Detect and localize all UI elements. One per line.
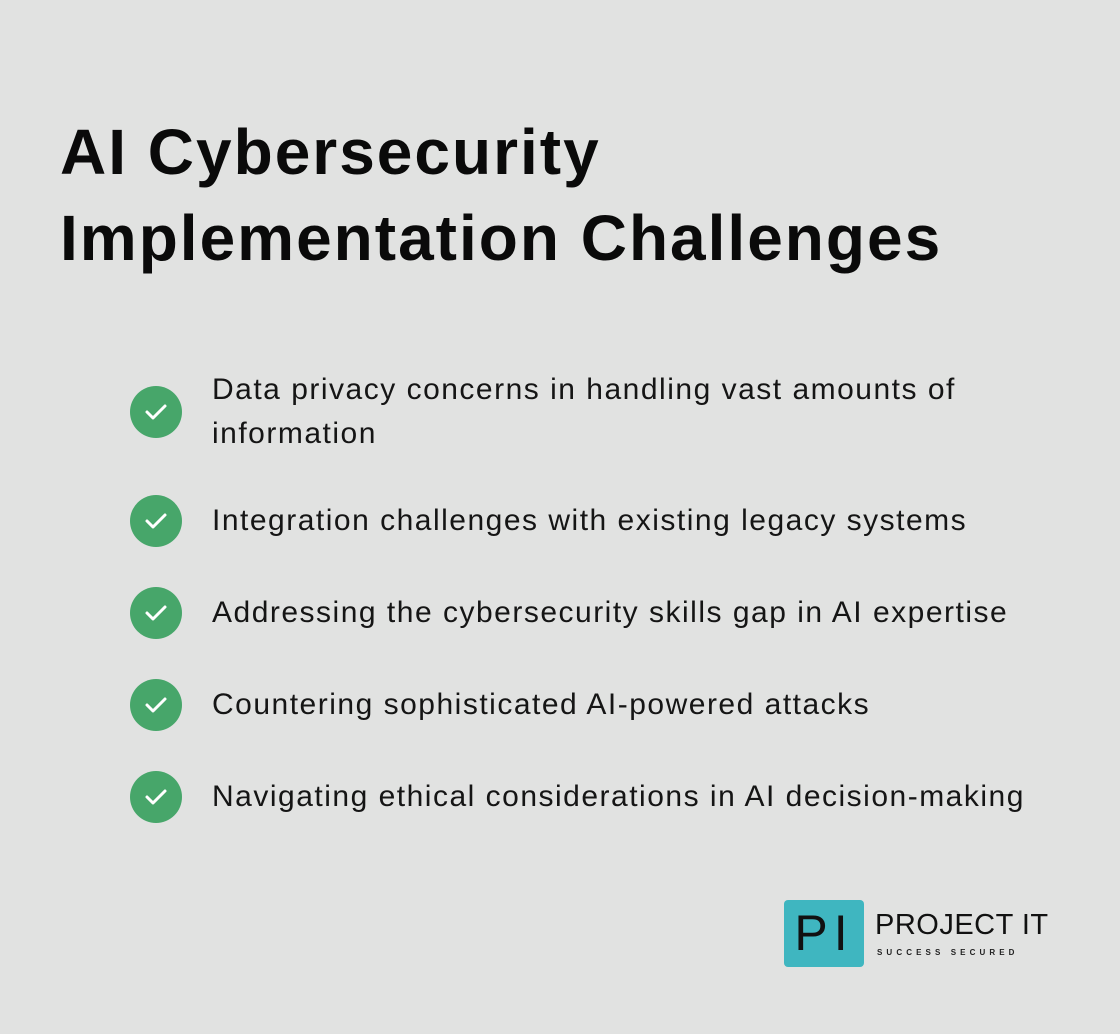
text: attacks: Countering sophisticated AI-powered attacks	[212, 688, 870, 721]
title: AI Cybersecurity	[60, 116, 601, 188]
item 3	[130, 587, 1008, 639]
logo mark	[784, 900, 864, 967]
icon: check	[130, 679, 182, 731]
text: ethics: Navigating ethical considerations in AI decision-making	[212, 780, 1025, 813]
logo text: PROJECT IT	[875, 909, 1049, 941]
text: data privacy: Data privacy concerns in handling vast amounts of	[212, 373, 956, 406]
item 1	[130, 373, 956, 450]
text: data privacy: information	[212, 417, 377, 450]
item 4	[130, 679, 870, 731]
text: skills gap: Addressing the cybersecurity skills gap in AI expertise	[212, 596, 1008, 629]
title	[60, 116, 942, 274]
text: data privacy	[212, 373, 956, 450]
tagline: SUCCESS SECURED	[877, 948, 1019, 957]
text: integration: Integration challenges with existing legacy systems	[212, 504, 967, 537]
logo mark: PI	[794, 905, 854, 961]
item 5	[130, 771, 1025, 823]
icon: check	[130, 495, 182, 547]
item 2	[130, 495, 967, 547]
icon: check	[130, 771, 182, 823]
logo	[784, 900, 1049, 967]
title: Implementation Challenges	[60, 202, 942, 274]
icon: check	[130, 587, 182, 639]
icon: check	[130, 386, 182, 438]
